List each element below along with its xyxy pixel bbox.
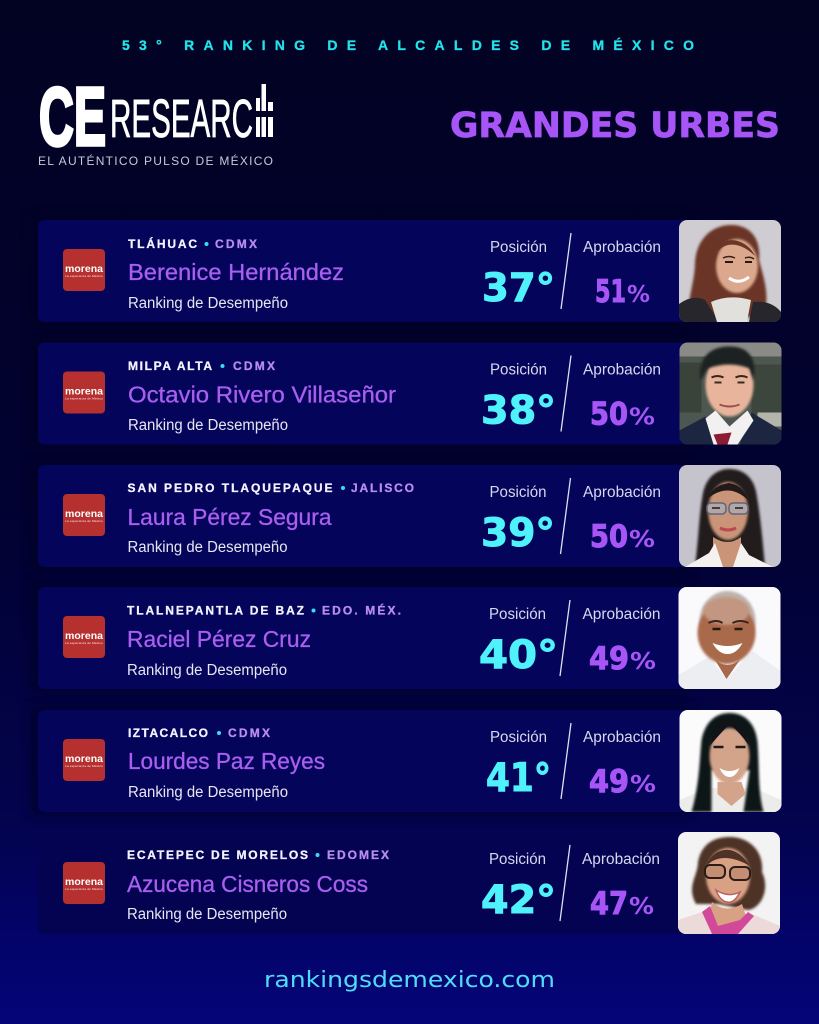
row 40: Raciel Pérez Cruz: [30, 583, 780, 693]
approval value: [589, 641, 656, 677]
party logo: morena: morena: [65, 876, 103, 888]
location: IZTACALCO: [128, 726, 208, 740]
location: [127, 848, 389, 862]
approval value: 49: [589, 764, 629, 800]
location: TLALNEPANTLA DE BAZ: [127, 604, 304, 618]
approval value: %: [627, 282, 650, 308]
divider: [561, 233, 571, 309]
divider: [560, 845, 570, 921]
approval label: Aprobación: [583, 729, 661, 746]
card background: [38, 220, 688, 322]
footer url: rankingsdemexico.com: [264, 968, 555, 993]
name: Raciel Pérez Cruz: [127, 626, 311, 652]
divider: [560, 600, 570, 676]
approval value: %: [630, 649, 656, 675]
name: Octavio Rivero Villaseñor: [128, 382, 396, 408]
position value: 41°: [486, 756, 551, 801]
approval value: [590, 396, 655, 432]
logo: CE Research: RESEARC: [110, 89, 253, 149]
name: Berenice Hernández: [128, 259, 344, 285]
subtitle: Ranking de Desempeño: [128, 295, 288, 312]
position value: 42°: [481, 878, 556, 923]
divider: [561, 723, 571, 799]
party logo: morena: morena: [65, 386, 103, 398]
portrait: [679, 465, 781, 567]
subtitle: Ranking de Desempeño: [128, 417, 288, 434]
portrait: [678, 587, 780, 689]
portrait: [678, 832, 780, 934]
approval label: Aprobación: [582, 851, 660, 868]
location: CDMX: [228, 726, 270, 740]
party logo: morena: [63, 494, 105, 536]
party logo: morena: La esperanza de México: [65, 396, 103, 400]
portrait: [680, 342, 782, 444]
card background: [38, 465, 688, 567]
name: Azucena Cisneros Coss: [127, 871, 368, 897]
divider: [561, 356, 571, 432]
location: ECATEPEC DE MORELOS: [127, 848, 308, 862]
approval value: %: [629, 404, 655, 430]
approval value: 50: [590, 396, 628, 432]
location: EDOMEX: [327, 848, 389, 862]
position value: 37°: [482, 266, 555, 311]
approval value: 49: [589, 641, 629, 677]
portrait: [680, 710, 782, 812]
location: TLÁHUAC: [128, 236, 197, 251]
approval value: 51: [595, 274, 626, 310]
position label: Posición: [490, 729, 547, 746]
party logo: morena: morena: [65, 630, 103, 642]
approval label: Aprobación: [583, 362, 661, 378]
party logo: morena: La esperanza de México: [65, 764, 103, 768]
party logo: morena: [63, 249, 105, 291]
subtitle: Ranking de Desempeño: [128, 784, 288, 801]
party logo: morena: La esperanza de México: [65, 641, 103, 645]
location: CDMX: [215, 237, 257, 251]
row 39: Laura Pérez Segura: [30, 461, 781, 571]
party logo: morena: La esperanza de México: [65, 519, 103, 523]
location: [128, 236, 257, 251]
location: EDO. MÉX.: [322, 602, 401, 618]
approval value: %: [630, 772, 656, 798]
position value: 40°: [479, 633, 558, 678]
card background: [38, 832, 688, 934]
approval value: [589, 764, 656, 800]
approval value: 47: [590, 886, 628, 922]
position label: Posición: [490, 362, 547, 378]
approval label: Aprobación: [582, 606, 660, 623]
top heading: 53° RANKING DE ALCALDES DE MÉXICO: [122, 37, 694, 53]
row 37: Berenice Hernández: [30, 216, 781, 326]
position label: Posición: [490, 239, 547, 256]
approval value: 50: [590, 519, 628, 555]
location: SAN PEDRO TLAQUEPAQUE: [128, 481, 332, 495]
location: [128, 726, 270, 740]
row 38: Octavio Rivero Villaseñor: [30, 338, 782, 448]
name: Lourdes Paz Reyes: [128, 748, 325, 774]
logo tagline: EL AUTÉNTICO PULSO DE MÉXICO: [38, 153, 273, 168]
row 41: Lourdes Paz Reyes: [30, 706, 782, 816]
position value: 39°: [481, 511, 555, 556]
approval value: %: [629, 527, 655, 553]
location: MILPA ALTA: [128, 359, 212, 373]
location: CDMX: [233, 359, 275, 373]
subtitle: Ranking de Desempeño: [127, 906, 287, 923]
party logo: morena: [63, 862, 105, 904]
party logo: morena: morena: [65, 263, 103, 275]
approval label: Aprobación: [583, 484, 661, 501]
card background: [38, 587, 688, 689]
card background: [38, 342, 688, 444]
row 42: Azucena Cisneros Coss: [38, 832, 780, 934]
position label: Posición: [489, 851, 546, 868]
party logo: morena: [63, 616, 105, 658]
location: [128, 359, 275, 373]
party logo: morena: [63, 372, 105, 414]
location: JALISCO: [351, 481, 414, 495]
card background: [38, 710, 688, 812]
logo: CE Research: CE: [39, 70, 106, 163]
divider: [560, 478, 570, 554]
approval value: %: [629, 894, 654, 920]
approval label: Aprobación: [583, 239, 661, 256]
position label: Posición: [489, 606, 546, 623]
location: [127, 602, 401, 618]
logo: CE Research: [39, 70, 273, 163]
name: Laura Pérez Segura: [128, 504, 332, 530]
portrait: [679, 220, 781, 322]
subtitle: Ranking de Desempeño: [127, 662, 287, 679]
section title: GRANDES URBES: [450, 106, 780, 146]
party logo: morena: [63, 739, 105, 781]
position label: Posición: [490, 484, 546, 501]
party logo: morena: morena: [65, 753, 103, 765]
party logo: morena: La esperanza de México: [65, 887, 103, 891]
position value: 38°: [481, 388, 556, 434]
approval value: [590, 519, 655, 555]
approval value: [590, 886, 654, 922]
subtitle: Ranking de Desempeño: [128, 539, 288, 556]
party logo: morena: La esperanza de México: [65, 274, 103, 278]
party logo: morena: morena: [65, 508, 103, 520]
